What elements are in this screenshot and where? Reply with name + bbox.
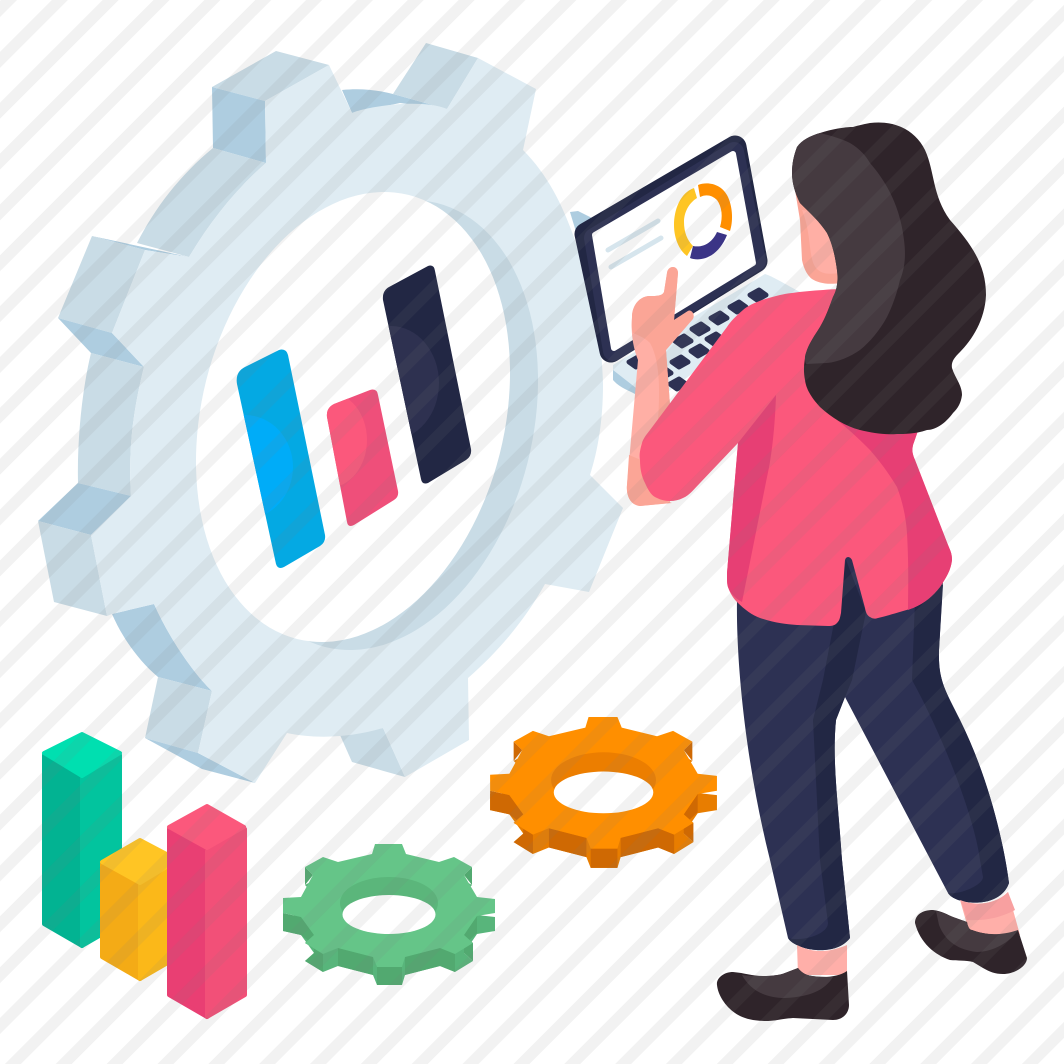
woman's arm and hand xyxy=(627,267,694,506)
blue bar xyxy=(236,350,326,568)
laptop xyxy=(586,147,800,398)
left ankle xyxy=(797,945,847,975)
donut chart xyxy=(674,183,732,259)
hair xyxy=(792,122,986,434)
left shoe xyxy=(717,968,849,1021)
navy bar xyxy=(382,266,472,484)
laptop screen frame xyxy=(586,147,756,351)
right ankle xyxy=(960,892,1020,935)
bar chart inside gear xyxy=(236,266,472,568)
laptop base xyxy=(613,274,800,398)
gear hole inner wall xyxy=(178,166,584,684)
green small gear xyxy=(283,844,495,985)
right shoe xyxy=(915,910,1027,974)
gear front face xyxy=(91,58,623,783)
large isometric gear xyxy=(38,43,623,783)
shirt shadow: back xyxy=(837,420,952,610)
face xyxy=(795,190,845,284)
orange small gear xyxy=(490,717,717,868)
screen text lines xyxy=(608,221,661,267)
shirt shadow: underarm xyxy=(727,395,776,602)
green column xyxy=(44,734,120,946)
yellow column xyxy=(102,840,178,979)
hair highlight xyxy=(792,133,905,364)
keyboard keys xyxy=(629,290,766,389)
pink column xyxy=(169,806,245,1017)
3D bar chart bottom left xyxy=(44,734,245,1017)
pink bar xyxy=(326,390,398,526)
trousers xyxy=(737,555,1009,950)
gear hole opening xyxy=(150,158,556,676)
shirt xyxy=(640,289,952,626)
